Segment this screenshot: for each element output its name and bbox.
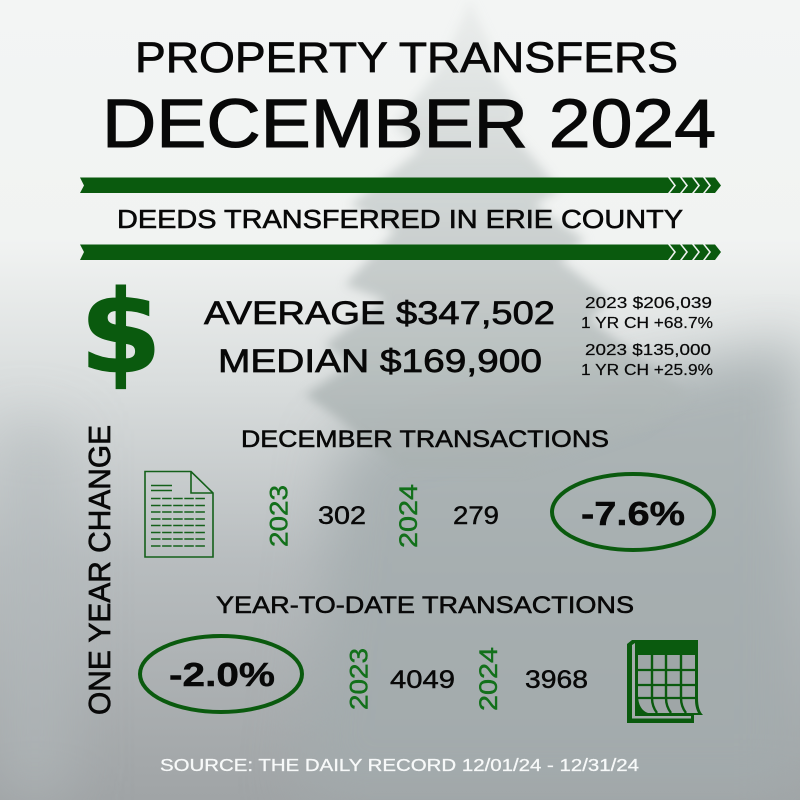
callout: december change <box>552 474 714 550</box>
year-to-date 2024 value: 3968 <box>525 666 588 694</box>
median price: MEDIAN $169,900 <box>218 343 542 379</box>
year-to-date 2024 value: 2024 <box>475 647 503 711</box>
december 2024 value <box>395 484 499 548</box>
icon: calendar <box>627 640 703 723</box>
december 2023 value: 302 <box>318 502 366 530</box>
average comparison: 2023 $206,039 <box>585 295 712 312</box>
ribbon: bottom arrow bar <box>80 244 721 260</box>
title: property transfers: PROPERTY TRANSFERS <box>135 34 678 82</box>
average comparison: 1 YR CH +68.7% <box>581 315 713 332</box>
median comparison: 1 YR CH +25.9% <box>581 362 713 379</box>
callout: year-to-date change <box>140 636 302 712</box>
december 2023 value: 2023 <box>266 485 294 547</box>
december 2023 value <box>266 485 366 547</box>
vertical label: one year change: ONE YEAR CHANGE <box>82 425 117 715</box>
callout: december change: -7.6% <box>581 495 685 532</box>
icon: dollar sign: $ <box>80 267 162 399</box>
median comparison: 2023 $135,000 <box>585 342 711 359</box>
year-to-date 2024 value <box>475 647 588 711</box>
callout: year-to-date change: -2.0% <box>169 656 275 693</box>
source line: SOURCE: THE DAILY RECORD 12/01/24 - 12/31/24 <box>160 755 639 775</box>
icon: document <box>145 472 213 557</box>
year-to-date 2023 value: 4049 <box>390 666 455 694</box>
heading: year-to-date transactions: YEAR-TO-DATE TRANSACTIONS <box>216 592 634 619</box>
average comparison <box>581 295 713 332</box>
december 2024 value: 279 <box>453 502 499 530</box>
average price: AVERAGE $347,502 <box>204 295 555 331</box>
year-to-date 2023 value: 2023 <box>346 648 374 710</box>
title: december 2024: DECEMBER 2024 <box>102 85 716 162</box>
december 2024 value: 2024 <box>395 484 423 548</box>
median comparison <box>581 342 713 379</box>
subtitle: deeds transferred: DEEDS TRANSFERRED IN ERIE COUNTY <box>117 204 683 234</box>
ribbon: top arrow bar <box>80 178 721 193</box>
heading: december transactions: DECEMBER TRANSACTIONS <box>241 426 609 453</box>
year-to-date 2023 value <box>346 648 455 710</box>
